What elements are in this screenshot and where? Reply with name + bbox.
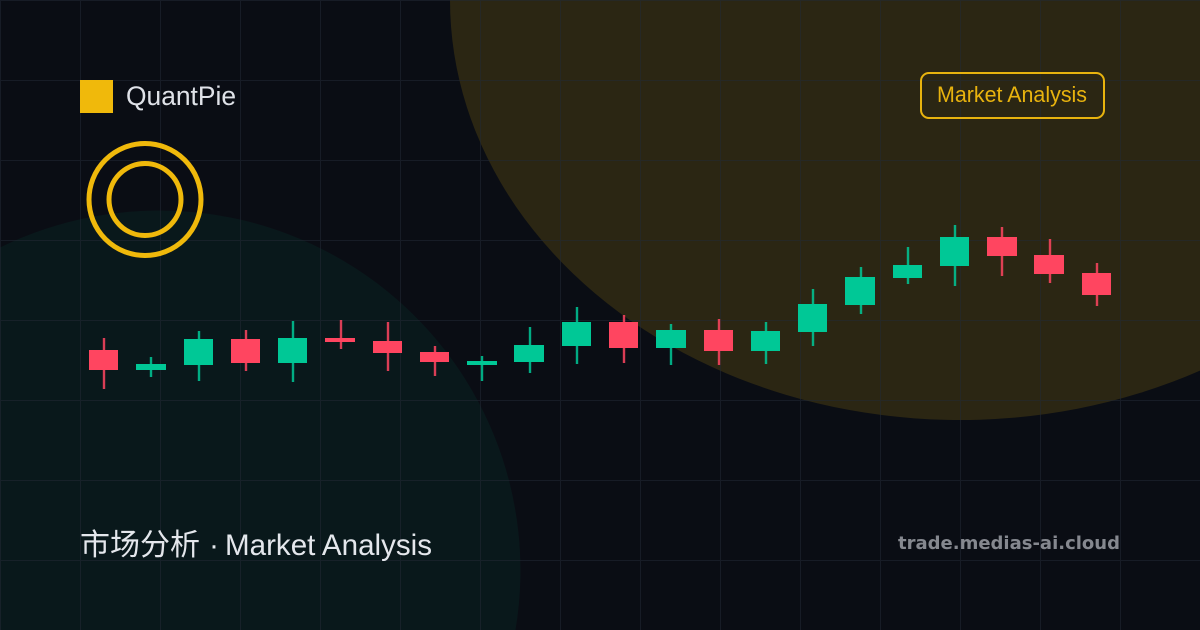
candle 12 xyxy=(609,315,638,363)
title: market analysis: 市场分析 xyxy=(80,529,200,562)
candle 5 xyxy=(278,321,307,382)
title: market analysis xyxy=(80,529,432,562)
background blob: teal xyxy=(0,210,520,630)
candle 16 xyxy=(798,289,827,346)
brand logo xyxy=(80,80,236,113)
candle 8 xyxy=(420,346,449,376)
icon: brand square xyxy=(80,80,113,113)
candle 4 xyxy=(231,330,260,371)
badge: Market Analysis xyxy=(921,73,1104,118)
candle 7 xyxy=(373,322,402,371)
candle 15 xyxy=(751,322,780,364)
candle 1 xyxy=(89,338,118,389)
candlestick chart xyxy=(89,225,1111,389)
badge: Market Analysis: Market Analysis xyxy=(937,82,1087,107)
candle 22 xyxy=(1082,263,1111,306)
footer url: trade.medias-ai.cloud xyxy=(898,533,1120,554)
candle 11 xyxy=(562,307,591,364)
candle 14 xyxy=(704,319,733,365)
brand name: QuantPie xyxy=(126,81,236,111)
candle 9 xyxy=(467,356,497,381)
icon: concentric rings xyxy=(89,144,201,256)
candle 3 xyxy=(184,331,213,381)
candle 10 xyxy=(514,327,544,373)
title: market analysis: · xyxy=(209,529,219,562)
candle 2 xyxy=(136,357,166,377)
candle 21 xyxy=(1034,239,1064,283)
candle 18 xyxy=(893,247,922,284)
background blob: amber xyxy=(450,0,1200,420)
candle 17 xyxy=(845,267,875,314)
candle 20 xyxy=(987,227,1017,276)
candle 6 xyxy=(325,320,355,349)
candle 13 xyxy=(656,324,686,365)
title: market analysis: Market Analysis xyxy=(225,529,432,562)
candle 19 xyxy=(940,225,969,286)
